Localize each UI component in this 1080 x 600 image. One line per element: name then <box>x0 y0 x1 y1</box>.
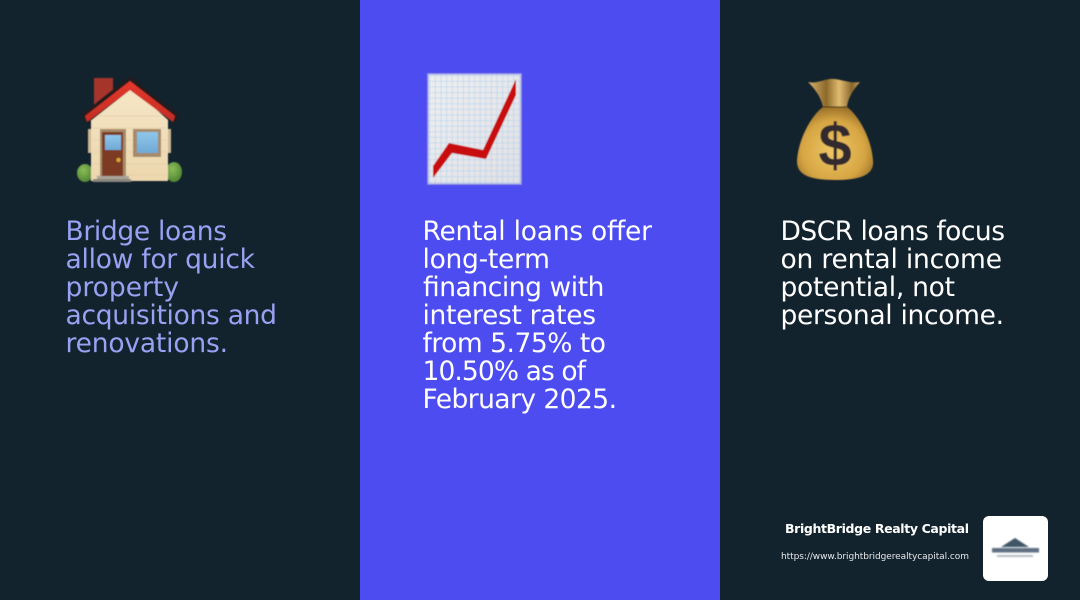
text: bridge loans: renovations. <box>66 328 228 359</box>
logo <box>983 516 1048 581</box>
text: rental loans: 10.50% as of <box>422 356 587 387</box>
company url: https://www.brightbridgerealtycapital.com <box>781 552 969 562</box>
footer: company brand <box>781 516 1048 581</box>
icon: house <box>77 76 182 182</box>
company name: BrightBridge Realty Capital <box>785 521 969 536</box>
text: rental loans: long-term <box>422 244 550 275</box>
text: bridge loans: property <box>66 272 179 303</box>
text: rental loans <box>422 216 652 415</box>
text: rental loans: financing with <box>423 272 604 303</box>
text: dscr loans: DSCR loans focus <box>780 216 1005 247</box>
text: rental loans: February 2025. <box>422 384 617 415</box>
panel: rental loans <box>360 0 720 600</box>
text: rental loans: Rental loans offer <box>422 216 652 247</box>
text: bridge loans: allow for quick <box>66 244 256 275</box>
panel: bridge loans <box>0 0 360 600</box>
text: bridge loans <box>66 216 277 359</box>
text: dscr loans <box>780 216 1005 331</box>
text: rental loans: from 5.75% to <box>422 328 606 359</box>
icon: money bag <box>797 79 873 180</box>
text: bridge loans: Bridge loans <box>66 216 227 247</box>
text: rental loans: interest rates <box>422 300 596 331</box>
text: dscr loans: on rental income <box>780 244 1002 275</box>
text: dscr loans: personal income. <box>780 300 1004 331</box>
text: bridge loans: acquisitions and <box>66 300 277 331</box>
icon: money bag: $ <box>818 112 852 179</box>
text: dscr loans: potential, not <box>780 272 955 303</box>
icon: chart <box>428 74 521 184</box>
panel: dscr loans <box>720 0 1080 600</box>
